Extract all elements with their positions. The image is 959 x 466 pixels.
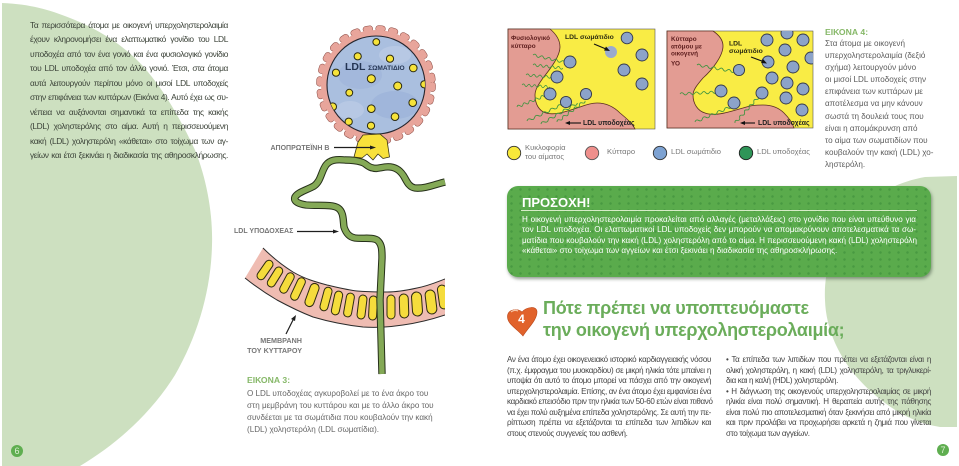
panel: warning box: [507, 186, 931, 277]
panel: familial hypercholesterolemia cell: ΥΟ: [671, 60, 680, 68]
text block: bottom right column: είναι πολύ πιο αποτελεσματική όταν ξεκινήσει από μικρή ηλικία: [726, 408, 931, 416]
text block: figure 4 caption: Στα άτομα με οικογενή: [825, 39, 905, 48]
panel: familial hypercholesterolemia cell: ατόμου με: [671, 44, 702, 50]
text block: figure 4 caption: κουβαλούν την κακή (LDL) χο-: [825, 148, 934, 157]
text block: figure 3 caption: [247, 389, 434, 434]
heading: when to suspect FH: Πότε πρέπει να υποπτευόμαστε: [543, 298, 809, 318]
text block: intro paragraph: αυτά λειτουργούν περίπου μόνο οι μισοί LDL υποδοχείς: [30, 78, 228, 88]
page number 6: 6: [14, 446, 20, 456]
legend: blood circulation: Κυκλοφορία: [525, 143, 566, 152]
text block: bottom right column: ολική χοληστερόλη, η κακή (LDL) χοληστερόλη, τα τριγλυκερί-: [726, 366, 931, 374]
text block: bottom right column: δια και η καλή (HDL) χοληστερόλη.: [726, 376, 838, 385]
LDL receptor: [295, 160, 445, 374]
panel: normal cell: [508, 29, 655, 129]
legend: LDL receptor: [739, 146, 810, 160]
text block: figure 3 caption: συνδέεται με τα σωμάτιδια που κουβαλούν την κακή: [247, 413, 433, 422]
heading: figure 4: ΕΙΚΟΝΑ 4:: [825, 27, 868, 37]
label: LDL receptor: LDL ΥΠΟΔΟΧΕΑΣ: [234, 228, 293, 235]
text block: bottom left column: Αν ένα άτομο έχει οικογενειακό ιστορικό καρδιαγγειακής νόσου: [507, 355, 711, 364]
text block: bottom left column: στους στενούς συγγενείς του ασθενή.: [507, 428, 628, 438]
cell membrane: [245, 248, 449, 327]
arrow: membrane: [286, 315, 296, 334]
text block: figure 3 caption: (LDL) χοληστερόλη (LDL σωματίδια).: [247, 425, 379, 434]
text block: figure 4 caption: σωστά τη δουλειά τους που: [825, 112, 924, 121]
text block: intro paragraph: (LDL) χοληστερόλης στο αίμα. Αυτή η περισσευούμενη: [30, 121, 228, 131]
panel: normal cell: LDL σωμάτιδιο: [565, 34, 614, 41]
text block: bottom left column: (π.χ. έμφραγμα του μυοκαρδίου) σε μικρή ηλικία τότε μπαίνει η: [507, 366, 711, 374]
text block: bottom right column: • Τα επίπεδα των λιπιδίων που πρέπει να εξετάζονται είναι η: [726, 355, 931, 364]
text block: intro paragraph: στην επιφάνεια των κυττάρων (Εικόνα 4). Αυτό έχει ως συ-: [30, 92, 228, 102]
text block: bottom right column: στο τοίχωμα των αγγείων.: [726, 428, 810, 438]
legend: LDL particle: [653, 146, 721, 160]
text block: bottom left column: καρδιακό επεισόδιο πριν την ηλικία των 50-60 ετών είναι πιθανό: [507, 397, 713, 406]
page number 7: 7: [940, 445, 946, 455]
icon: heart with number 4: 4: [518, 312, 525, 326]
figure 4: normal vs FH cell diagrams: [506, 28, 814, 160]
panel: normal cell: LDL υποδοχέας: [583, 120, 635, 127]
label: apolipoprotein B: ΑΠΟΠΡΩΤΕΪΝΗ Β: [270, 144, 329, 152]
text block: figure 4 caption: οι μισοί LDL υποδοχείς στην: [825, 75, 926, 84]
text block: intro paragraph: γείων και έτσι ξεκινάει η διαδικασία της αθηροσκλήρωσης.: [30, 150, 228, 160]
apolipoprotein B: [354, 134, 390, 160]
text block: intro paragraph: του LDL υποδοχέα από τον άλλο γονιό. Έτσι, στα άτομα: [30, 63, 228, 73]
panel: familial hypercholesterolemia cell: [667, 27, 817, 128]
heading: when to suspect FH: [543, 298, 844, 340]
text block: figure 4 caption: είναι η απομάκρυνση από: [825, 124, 918, 133]
warning text: Η οικογενή υπερχοληστερολαιμία προκαλείται από αλλαγές (μεταλλάξεις) στο γονίδιο που είναι υπεύθυνο για: [522, 214, 916, 224]
legend: cell: Κύτταρο: [607, 147, 635, 156]
text block: figure 4 caption: το αίμα των σωματιδίων που: [825, 136, 928, 145]
LDL particle: [320, 28, 432, 142]
text block: intro paragraph: υποδοχέα από τον ένα γονιό και ένα φυσιολογικό γονίδιο: [30, 49, 228, 59]
text block: figure 3 caption: Ο LDL υποδοχέας αγκυροβολεί με το ένα άκρο του: [247, 389, 428, 398]
text block: bottom left column: ρίπτωση πρέπει να εξετάζονται τα επίπεδα των λιπιδίων και: [507, 418, 711, 427]
text block: bottom right column: και πριν προλάβει να προχωρήσει αρκετά η ζημιά που γίνεται: [726, 418, 931, 427]
text block: figure 3 caption: στη μεμβράνη του κυττάρου και με το άλλο άκρο του: [247, 401, 434, 410]
legend: LDL receptor: LDL υποδοχέας: [757, 147, 810, 156]
text block: bottom left column: υπερχοληστερολαιμία. Επίσης, αν ένα άτομο έχει εμφανίσει ένα: [507, 386, 711, 396]
text block: figure 4 caption: ληστερόλη.: [825, 160, 865, 169]
panel: familial hypercholesterolemia cell: σωμάτιδιο: [729, 48, 763, 55]
text block: intro paragraph: Τα περισσότερα άτομα με οικογενή υπερχοληστερολαιμία: [30, 20, 228, 30]
legend: LDL particle: LDL σωμάτιδιο: [671, 147, 721, 156]
arrow: apolipoprotein B: [334, 146, 376, 150]
panel: familial hypercholesterolemia cell: LDL υποδοχέας: [758, 120, 810, 127]
text block: bottom right column: [726, 355, 932, 438]
text block: intro paragraph: κακή (LDL) χοληστερόλη «κάθεται» στο τοίχωμα των αγ-: [30, 136, 228, 146]
label: LDL particle: LDL ΣΩΜΑΤΙΔΙΟ: [345, 61, 405, 73]
legend: blood circulation: του αίματος: [525, 152, 564, 161]
warning text: ματίδια που κουβαλούν την κακή (LDL) χοληστερόλη από το αίμα. Η περισσευούμενη κακή (LDL) χοληστερόλη: [522, 236, 917, 245]
heading: when to suspect FH: την οικογενή υπερχοληστερολαιμία;: [543, 320, 844, 340]
page number 6: [11, 445, 23, 457]
text block: figure 4 caption: σχήμα) λειτουργούν μόνο: [825, 63, 916, 72]
arrow: LDL receptor: [297, 230, 339, 234]
text block: figure 4 caption: αποτέλεσμα να μην κάνουν: [825, 99, 923, 108]
warning heading: ΠΡΟΣΟΧΗ!: [522, 194, 590, 210]
page number 7: [937, 444, 949, 456]
legend: cell: [585, 146, 635, 160]
text block: bottom left column: υποψία ότι αυτό το άτομο μπορεί να πάσχει από την οικογενή: [507, 376, 711, 385]
text block: figure 4 caption: υπερχοληστερολαιμία (δεξιό: [825, 51, 925, 60]
text block: bottom left column: [507, 355, 713, 438]
panel: normal cell: Φυσιολογικό: [511, 34, 550, 42]
warning text: «κάθεται» στο τοίχωμα των αγγείων και έτσι ξεκινάει η διαδικασία της αθηροσκλήρωσης.: [522, 246, 837, 255]
panel: familial hypercholesterolemia cell: LDL: [729, 40, 742, 48]
text block: bottom left column: να έχει πολύ αυξημένα επίπεδα χοληστερόλης. Σε αυτή την πε-: [507, 408, 711, 416]
panel: normal cell: κύτταρο: [511, 43, 536, 50]
warning text: τον LDL υποδοχέα. Οι ελαττωματικοί LDL υποδοχείς δεν μπορούν να απομακρύνουν αποτελεσματικά τα σω-: [522, 225, 916, 234]
text block: figure 4 caption: επιφάνεια των κυττάρων με: [825, 87, 923, 96]
text block: intro paragraph: νέπεια να αυξάνονται σημαντικά τα επίπεδα της κακής: [30, 107, 228, 117]
panel: familial hypercholesterolemia cell: Κύτταρο: [671, 36, 697, 43]
panel: familial hypercholesterolemia cell: οικογενή: [671, 50, 698, 58]
figure 3: LDL receptor illustration: [234, 25, 446, 374]
heading: figure 3: ΕΙΚΟΝΑ 3:: [247, 375, 290, 385]
text block: intro paragraph: έχουν κληρονομήσει ένα ελαττωματικό γονίδιο του LDL: [30, 34, 228, 44]
text block: bottom right column: ηλικία είναι πολύ σημαντική. Η θεραπεία αυτής της πάθησης: [726, 397, 931, 406]
label: cell membrane: ΜΕΜΒΡΑΝΗ: [260, 336, 302, 345]
text block: intro paragraph: [30, 20, 228, 160]
legend: blood circulation: [507, 143, 566, 161]
label: cell membrane: ΤΟΥ ΚΥΤΤΑΡΟΥ: [247, 346, 302, 355]
warning text: [522, 214, 917, 255]
text block: figure 4 caption: [825, 39, 934, 169]
text block: bottom right column: • Η διάγνωση της οικογενούς υπερχοληστερολαιμίας σε μικρή: [726, 386, 931, 396]
